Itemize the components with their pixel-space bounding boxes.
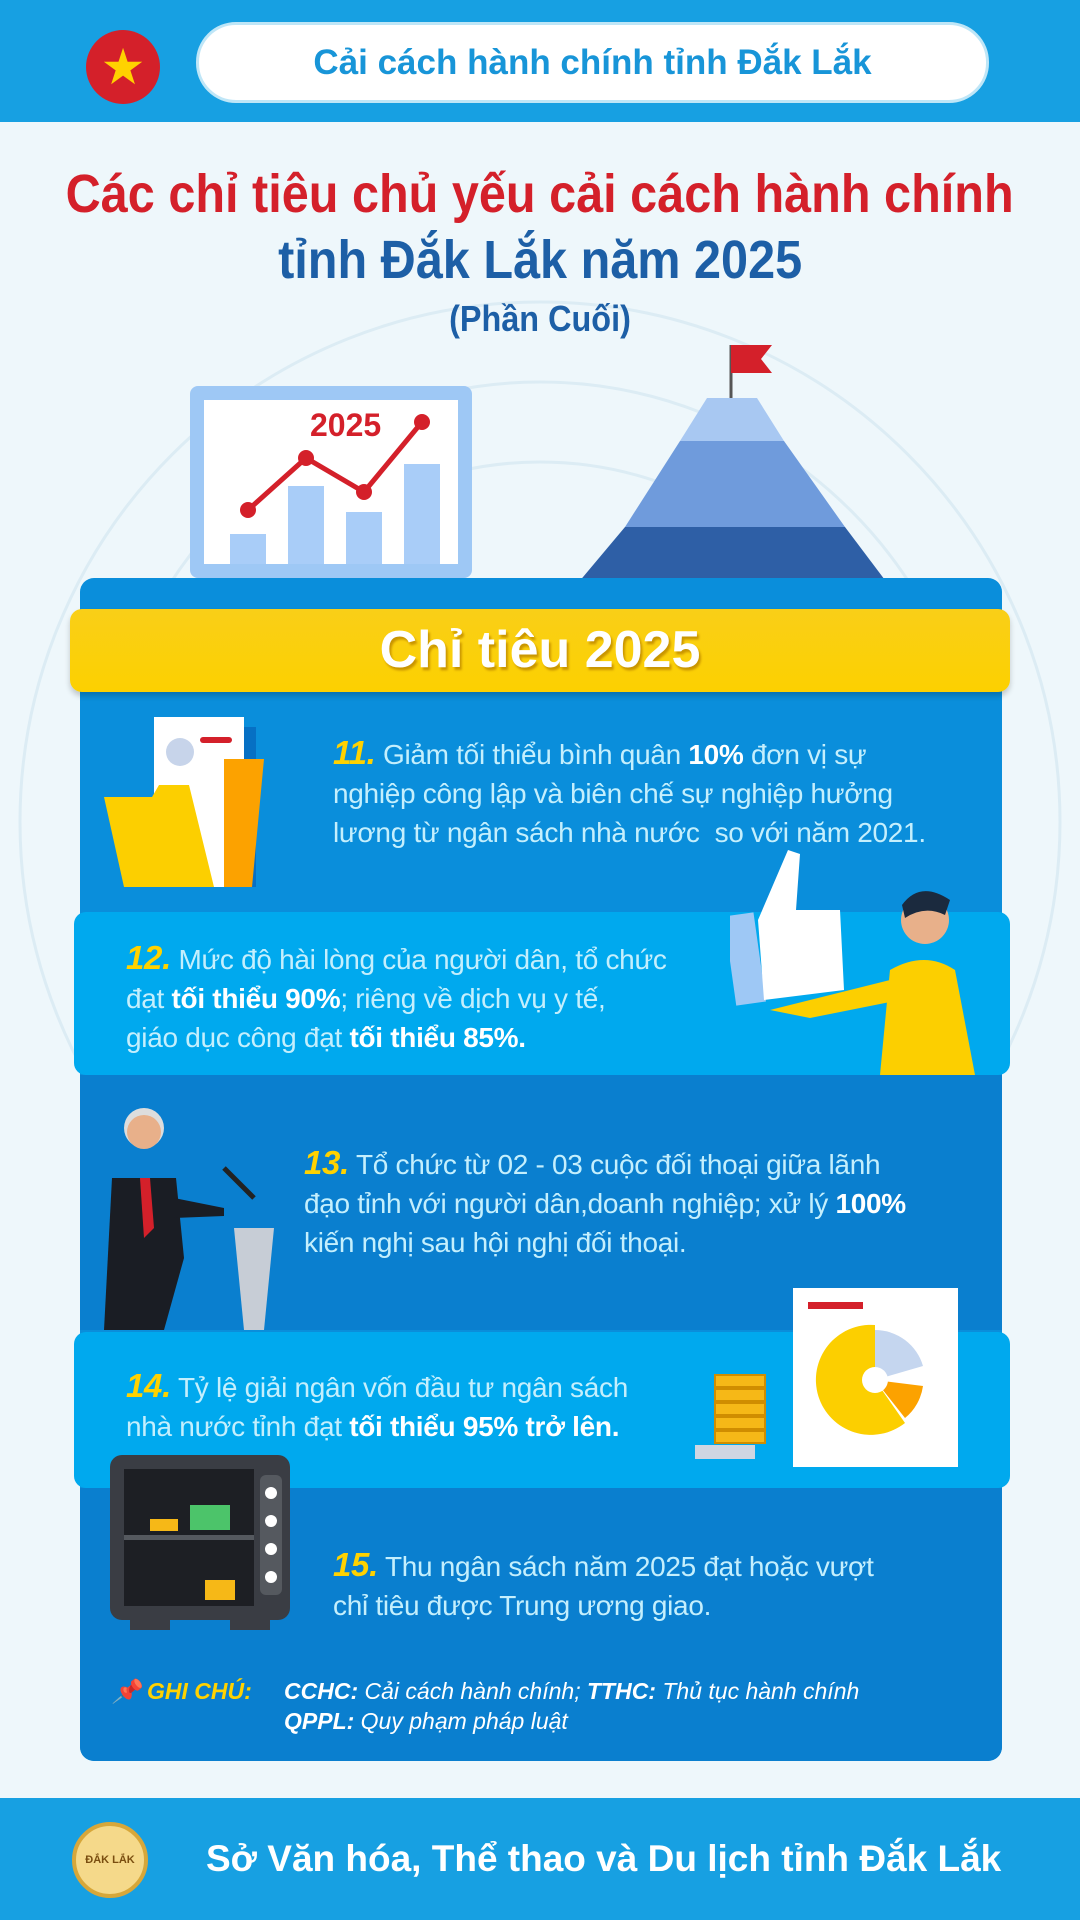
band: item 12	[74, 912, 1010, 1075]
illustration: mountain with flag	[582, 345, 884, 578]
icon: folder	[104, 717, 264, 887]
footer text: Sở Văn hóa, Thể thao và Du lịch tỉnh Đắk Lắk	[206, 1838, 1001, 1879]
item 13	[304, 1144, 906, 1258]
item 13: đạo tỉnh với người dân,doanh nghiệp; xử lý 100%	[304, 1188, 906, 1219]
illustration: monitor chart	[190, 386, 472, 578]
note: ghi chu	[112, 1678, 859, 1734]
item 15: 15. Thu ngân sách năm 2025 đạt hoặc vượt	[333, 1546, 874, 1583]
item 15	[333, 1546, 874, 1621]
item 13: kiến nghị sau hội nghị đối thoại.	[304, 1227, 686, 1258]
logo: star emblem: ★	[101, 39, 145, 95]
main title: (Phần Cuối)	[449, 298, 631, 339]
item 14 text: 14. Tỷ lệ giải ngân vốn đầu tư ngân sách	[126, 1367, 628, 1404]
item 12 text: giáo dục công đạt tối thiểu 85%.	[126, 1022, 526, 1053]
yellow banner	[70, 609, 1010, 692]
icon: speaker at podium	[104, 1108, 274, 1330]
band: item 14	[74, 1332, 1010, 1488]
footer logo: ĐẮK LẮK	[85, 1854, 135, 1866]
icon: coins	[695, 1374, 766, 1459]
item 11	[333, 734, 926, 848]
item 12 text: 12. Mức độ hài lòng của người dân, tổ chức	[126, 939, 667, 976]
main blue panel	[80, 578, 1002, 1761]
main title	[66, 164, 1014, 339]
item 14 text: nhà nước tỉnh đạt tối thiểu 95% trở lên.	[126, 1411, 619, 1442]
icon: thumbs up and person	[730, 850, 975, 1075]
item 15: chỉ tiêu được Trung ương giao.	[333, 1590, 711, 1621]
main title: tỉnh Đắk Lắk năm 2025	[278, 230, 802, 290]
logo: star emblem	[86, 30, 160, 104]
note: ghi chu: 📌 GHI CHÚ:	[112, 1678, 252, 1704]
item 11: nghiệp công lập và biên chế sự nghiệp hưởng	[333, 778, 893, 809]
item 13: 13. Tổ chức từ 02 - 03 cuộc đối thoại giữa lãnh	[304, 1144, 880, 1181]
item 11: 11. Giảm tối thiểu bình quân 10% đơn vị sự	[333, 734, 866, 771]
yellow banner: Chỉ tiêu 2025	[380, 621, 700, 679]
footer bar	[0, 1798, 1080, 1920]
icon: safe	[110, 1455, 290, 1630]
item 12 text	[126, 939, 667, 1053]
note: ghi chu: QPPL: Quy phạm pháp luật	[284, 1708, 568, 1734]
main title: Các chỉ tiêu chủ yếu cải cách hành chính	[66, 164, 1014, 224]
header pill title: Cải cách hành chính tỉnh Đắk Lắk	[313, 43, 872, 82]
item 12 text: đạt tối thiểu 90%; riêng về dịch vụ y tế,	[126, 983, 605, 1014]
header pill title	[196, 22, 989, 103]
footer logo	[72, 1822, 148, 1898]
item 14 text	[126, 1367, 628, 1442]
illustration: monitor chart: 2025	[310, 407, 381, 443]
header bar	[0, 0, 1080, 122]
note: ghi chu: CCHC: Cải cách hành chính; TTHC: Thủ tục hành chính	[284, 1678, 859, 1704]
chart card	[793, 1288, 958, 1467]
item 11: lương từ ngân sách nhà nước so với năm 2021.	[333, 817, 926, 848]
